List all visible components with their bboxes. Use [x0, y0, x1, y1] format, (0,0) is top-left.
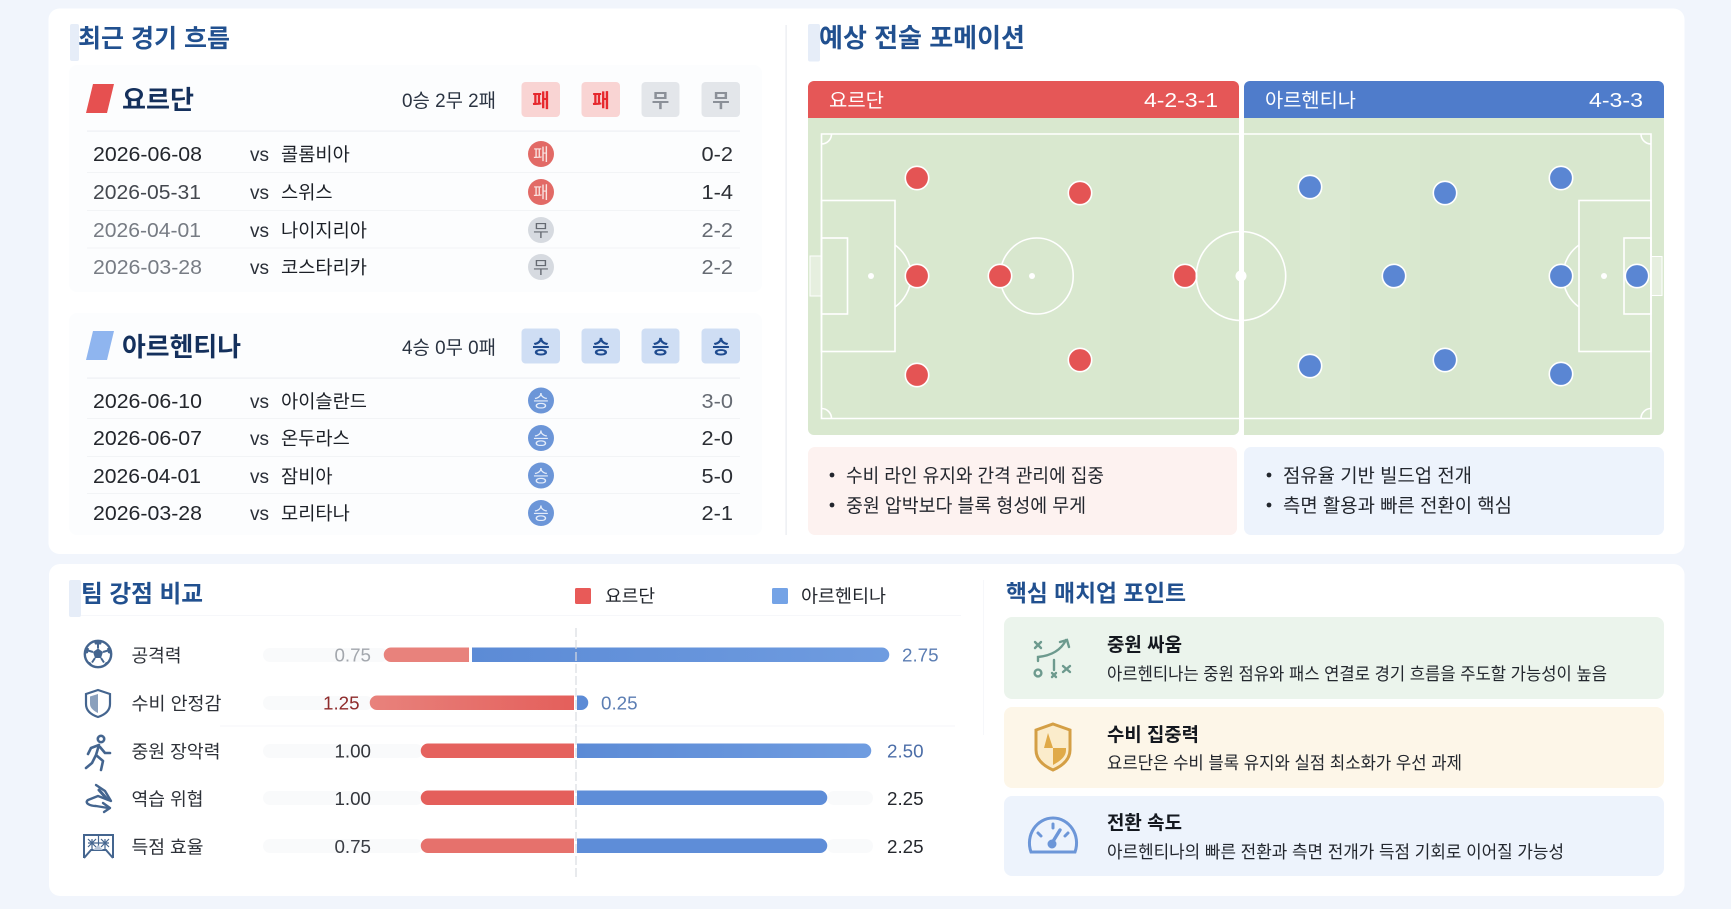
row: defensive stability: [86, 690, 638, 717]
match row: [93, 462, 733, 488]
heading: team strength comparison: [69, 580, 203, 617]
match row: 콜롬비아: [281, 144, 350, 165]
card: midfield battle: 아르헨티나는 중원 점유와 패스 연결로 경기 흐름을 주도할 가능성이 높음: [1107, 664, 1607, 684]
card: midfield battle: [1004, 617, 1664, 699]
match row: 승: [533, 430, 549, 448]
icon: counter arrow: [87, 785, 111, 812]
row: counter threat: 2.25: [887, 788, 924, 809]
match row: [93, 254, 733, 280]
row: counter threat: 1.00: [334, 788, 371, 809]
match row: 2026-06-08: [93, 143, 202, 166]
match row: vs: [250, 145, 269, 166]
match row: 2-2: [702, 256, 733, 279]
row: midfield control: 2.50: [887, 740, 924, 762]
icon: shield: [86, 690, 110, 717]
heading: key matchup points: 핵심 매치업 포인트: [1006, 580, 1186, 606]
match row: 2026-06-07: [93, 427, 202, 450]
icon: goal net: [84, 835, 113, 858]
team header: Argentina: [86, 328, 740, 364]
match row: 2026-03-28: [93, 256, 202, 279]
team bar: Argentina 4-3-3: 아르헨티나: [1265, 90, 1356, 112]
team header: Argentina: 4승 0무 0패: [402, 337, 496, 359]
pitch markings: [1244, 134, 1662, 418]
team bar: Argentina 4-3-3: [1244, 81, 1664, 118]
card: Argentina form: [69, 313, 762, 535]
heading: expected formations: 예상 전술 포메이션: [819, 23, 1025, 53]
row: scoring efficiency: [84, 835, 924, 858]
pitch: Argentina: [1244, 81, 1664, 435]
match row: vs: [250, 504, 269, 525]
heading: team strength comparison: 팀 강점 비교: [81, 581, 203, 608]
team header: Jordan: 0승 2무 2패: [402, 90, 496, 112]
match row: 2026-04-01: [93, 219, 201, 242]
note: Argentina tactics: 점유율 기반 빌드업 전개: [1283, 465, 1472, 487]
row: scoring efficiency: 득점 효율: [132, 838, 204, 858]
icon: soccer ball: [85, 641, 111, 667]
match row: 무: [533, 222, 549, 240]
note: Jordan tactics: 중원 압박보다 블록 형성에 무게: [846, 495, 1086, 517]
match row: 코스타리카: [281, 257, 367, 278]
row: counter threat: 역습 위협: [132, 790, 204, 810]
team header: Jordan: 요르단: [122, 85, 194, 115]
match row: 2-1: [702, 502, 733, 525]
legend: [575, 586, 886, 606]
card: transition speed: 아르헨티나의 빠른 전환과 측면 전개가 득점 기회로 이어질 가능성: [1107, 842, 1564, 862]
panel: key matchup points: [1004, 580, 1664, 876]
note: Jordan tactics: [808, 447, 1237, 535]
team header: Jordan: [86, 82, 740, 117]
match row: 3-0: [702, 390, 733, 413]
panel: expected formations: [808, 23, 1664, 535]
team header: Jordan: 패: [592, 90, 610, 112]
match row: 승: [533, 392, 549, 411]
team header: Argentina: 승: [532, 336, 550, 358]
match row: 나이지리아: [281, 220, 367, 241]
legend: 요르단: [605, 586, 655, 606]
row: scoring efficiency: 2.25: [887, 836, 924, 857]
match row: vs: [250, 258, 269, 279]
row: attack: 0.75: [334, 644, 371, 666]
card: Jordan form: [69, 65, 762, 292]
panel: team strength comparison: [69, 580, 984, 877]
match row: 스위스: [281, 182, 333, 203]
axis line: [575, 628, 577, 877]
row: counter threat: [87, 785, 924, 812]
center circle: [1196, 118, 1286, 435]
panel: top: [48, 8, 1684, 554]
legend: 아르헨티나: [801, 586, 886, 606]
note: Argentina tactics: 측면 활용과 빠른 전환이 핵심: [1283, 495, 1512, 517]
card: defensive focus: [1004, 707, 1664, 788]
match row: 2-0: [702, 427, 733, 450]
row: attack: [85, 641, 939, 667]
match row: 승: [533, 467, 549, 486]
row: scoring efficiency: 0.75: [334, 836, 371, 857]
match row: vs: [250, 183, 269, 204]
row: attack: 공격력: [132, 646, 182, 666]
match row: 아이슬란드: [281, 391, 367, 412]
panel: recent match flow: [69, 24, 762, 535]
card: defensive focus: 수비 집중력: [1107, 724, 1199, 746]
team header: Jordan: 패: [532, 90, 550, 112]
row: defensive stability: 1.25: [323, 692, 360, 714]
match row: 잠비아: [281, 466, 333, 487]
match row: 패: [533, 184, 549, 202]
row: midfield control: [86, 736, 924, 770]
icon: gauge: [1029, 818, 1077, 852]
match row: [93, 388, 733, 414]
team bar: Jordan 4-2-3-1: [808, 81, 1239, 118]
players: Argentina: [1298, 166, 1649, 386]
match row: 무: [533, 258, 549, 278]
note: Argentina tactics: [1244, 447, 1664, 535]
team header: Jordan: 무: [712, 91, 730, 112]
team header: Argentina: 승: [712, 336, 730, 358]
team bar: Jordan 4-2-3-1: 4-2-3-1: [1144, 90, 1218, 112]
pitch: Jordan: [808, 81, 1239, 435]
row: defensive stability: 수비 안정감: [132, 694, 222, 714]
match row: 2026-06-10: [93, 390, 202, 413]
match row: [93, 500, 733, 526]
match row: 2026-03-28: [93, 502, 202, 525]
panel: bottom: [49, 564, 1684, 896]
row: defensive stability: 0.25: [601, 692, 638, 714]
row: midfield control: 중원 장악력: [132, 742, 220, 762]
match row: 모리타나: [281, 503, 350, 524]
butterfly chart: [84, 628, 939, 877]
card: transition speed: 전환 속도: [1107, 812, 1182, 834]
match row: vs: [250, 429, 269, 450]
match row: vs: [250, 221, 269, 242]
players: Jordan: [905, 166, 1197, 387]
match row: 온두라스: [281, 428, 350, 449]
heading: recent match flow: 최근 경기 흐름: [78, 25, 230, 53]
row: attack: 2.75: [902, 644, 939, 666]
match row: vs: [250, 467, 269, 488]
match row: 5-0: [702, 465, 733, 488]
card: defensive focus: 요르단은 수비 블록 유지와 실점 최소화가 우선 과제: [1107, 753, 1462, 773]
team header: Argentina: 승: [652, 336, 669, 358]
match row: 승: [533, 504, 549, 524]
row: midfield control: 1.00: [334, 740, 371, 762]
card: transition speed: [1004, 796, 1664, 876]
match row: 0-2: [702, 143, 733, 166]
match row: 2026-04-01: [93, 465, 201, 488]
match row: 2-2: [702, 219, 733, 242]
pitch markings: [810, 134, 1239, 418]
team bar: Argentina 4-3-3: 4-3-3: [1589, 90, 1643, 112]
note: Jordan tactics: 수비 라인 유지와 간격 관리에 집중: [846, 465, 1104, 487]
icon: tactics board: [1035, 640, 1070, 677]
team header: Argentina: 승: [592, 336, 610, 358]
match row: [93, 179, 733, 205]
icon: runner: [86, 736, 110, 770]
match row: 2026-05-31: [93, 181, 201, 204]
team bar: Jordan 4-2-3-1: 요르단: [829, 90, 884, 112]
match row: 패: [533, 146, 549, 164]
card: midfield battle: 중원 싸움: [1107, 634, 1182, 656]
team header: Argentina: 아르헨티나: [122, 332, 241, 362]
match row: [93, 217, 733, 243]
match row: 1-4: [702, 181, 733, 204]
match row: [93, 141, 733, 167]
icon: shield: [1036, 724, 1070, 770]
match row: vs: [250, 392, 269, 413]
match row: [93, 425, 733, 451]
team header: Jordan: 무: [652, 91, 669, 112]
